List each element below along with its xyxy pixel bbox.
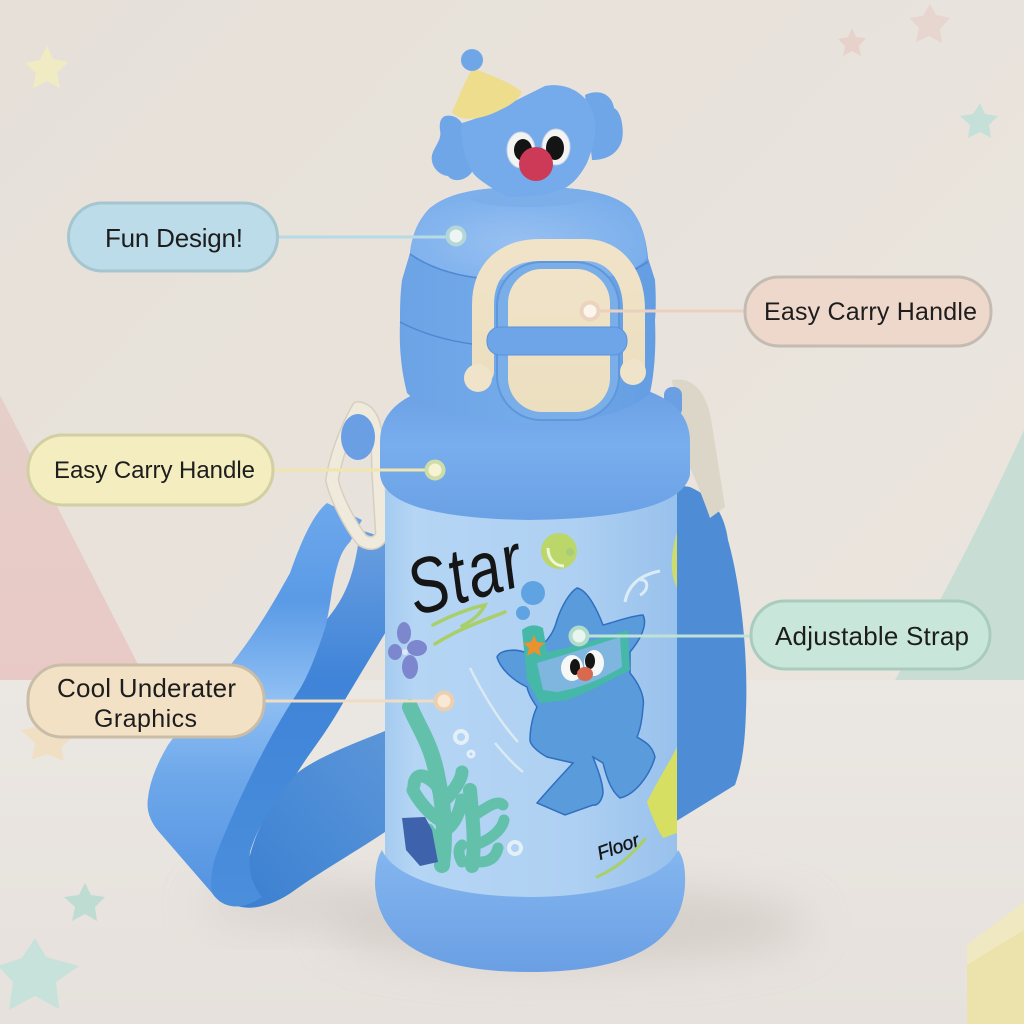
clown topper bbox=[432, 49, 623, 197]
adjustable strap, left loop bbox=[148, 503, 393, 908]
green scribbles bbox=[433, 605, 505, 644]
right clip bbox=[672, 379, 725, 518]
floor shadow bbox=[200, 885, 810, 963]
goggle star bbox=[523, 635, 545, 656]
label: Easy Carry Handle left bbox=[28, 435, 273, 505]
head bbox=[462, 85, 595, 197]
dark blue coral bbox=[402, 817, 438, 866]
hand lettered word Star: Star bbox=[397, 515, 535, 632]
blue frame bbox=[497, 262, 619, 420]
lid dome bbox=[410, 187, 647, 280]
diver eyes and nose bbox=[561, 650, 604, 681]
left ear bbox=[432, 116, 472, 180]
connector: easy carry handle left bbox=[274, 462, 444, 478]
left pin bbox=[341, 414, 375, 460]
eyes bbox=[507, 129, 570, 168]
hand lettered word Floor: Floor bbox=[595, 830, 643, 865]
swirl bbox=[625, 571, 660, 602]
label: Fun Design! bbox=[68, 203, 278, 271]
underwater graphics bbox=[388, 515, 677, 877]
blue bubbles bbox=[516, 581, 545, 620]
bottle body bbox=[385, 490, 677, 900]
label: Cool Underater Graphics: Graphics bbox=[94, 705, 197, 733]
yellow shapes bbox=[647, 532, 677, 838]
hat pom bbox=[461, 49, 483, 71]
label: Adjustable Strap: Adjustable Strap bbox=[775, 621, 969, 651]
bottle shoulder collar bbox=[380, 384, 690, 520]
label: Fun Design!: Fun Design! bbox=[105, 223, 243, 253]
strap lower band bbox=[235, 731, 385, 908]
topper base plate bbox=[470, 189, 586, 207]
green underline bbox=[597, 839, 645, 877]
right pin bbox=[664, 387, 682, 417]
lid silhouette bbox=[400, 187, 656, 423]
motion lines bbox=[470, 668, 523, 772]
strap clips bbox=[332, 379, 725, 543]
label: Easy Carry Handle right: Easy Carry Handle bbox=[764, 298, 977, 326]
label: Cool Underater Graphics: Cool Underater bbox=[57, 673, 236, 703]
red nose bbox=[519, 147, 553, 181]
connector: adjustable strap bbox=[570, 628, 750, 644]
goggles bbox=[522, 625, 630, 703]
label: Easy Carry Handle left: Easy Carry Handle bbox=[54, 457, 255, 484]
connector: underwater graphics bbox=[265, 692, 452, 710]
bottle base bbox=[375, 850, 685, 972]
strap front band bbox=[148, 503, 362, 893]
blue cross bar bbox=[487, 327, 627, 355]
seaweed bbox=[410, 707, 504, 866]
white bubbles bbox=[455, 731, 521, 854]
lid bbox=[400, 187, 656, 423]
party hat bbox=[452, 68, 522, 119]
carry handle bbox=[464, 250, 646, 420]
strap return band bbox=[204, 530, 393, 906]
handle end caps bbox=[464, 359, 646, 392]
purple flower bbox=[388, 622, 427, 679]
label: Adjustable Strap bbox=[751, 601, 990, 669]
label: Cool Underater Graphics bbox=[28, 665, 264, 737]
starfish diver bbox=[497, 588, 655, 815]
left clip bbox=[332, 408, 382, 543]
connector: easy carry handle right bbox=[582, 302, 744, 320]
label: Easy Carry Handle right bbox=[745, 277, 991, 346]
lid grooves bbox=[400, 254, 648, 344]
adjustable strap, back right bbox=[670, 484, 746, 825]
green bubble bbox=[541, 533, 577, 569]
connector: fun design bbox=[279, 228, 464, 244]
right ear bbox=[585, 92, 623, 160]
cream arch bbox=[483, 250, 634, 372]
cream pad bbox=[508, 269, 610, 412]
